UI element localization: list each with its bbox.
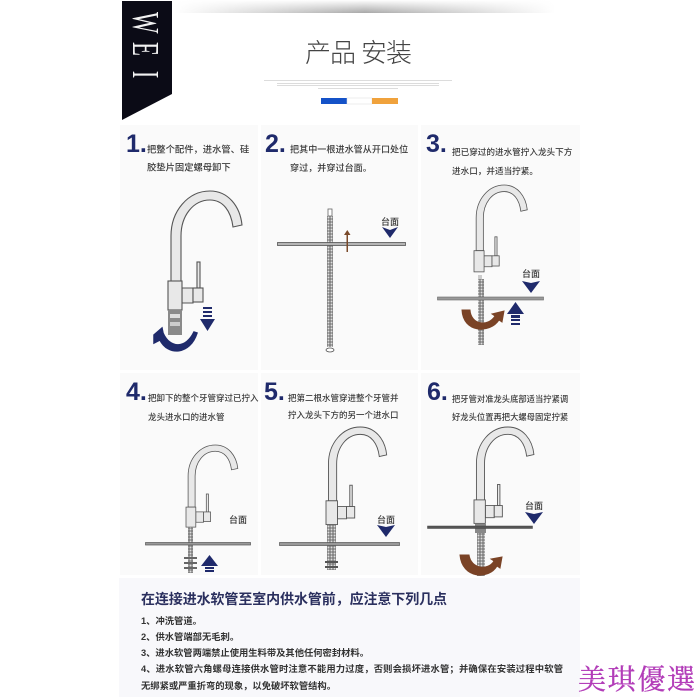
icon: faucet 6	[474, 427, 534, 523]
number 6: 6.	[427, 378, 448, 406]
notes list: 2、供水管端部无毛刺。	[141, 631, 239, 642]
colour bar	[321, 98, 398, 104]
subtitle fine print	[264, 80, 452, 89]
icon: faucet 5	[326, 427, 387, 525]
label 台面: 台面	[229, 514, 247, 525]
nut 4	[184, 557, 197, 569]
icon: up arrow	[344, 230, 350, 252]
instructions 3	[452, 146, 573, 176]
instructions 2	[290, 144, 408, 173]
number 5: 5.	[264, 378, 285, 406]
icon: down arrow	[200, 307, 215, 331]
counter 2	[278, 242, 406, 246]
instructions 2: 穿过，并穿过台面。	[290, 162, 372, 173]
counter 5	[280, 542, 400, 546]
label 台面: 台面	[522, 268, 540, 279]
instructions 6: 好龙头位置再把大螺母固定拧紧	[452, 412, 568, 422]
hose 6	[475, 524, 486, 576]
number 4: 4.	[126, 378, 147, 406]
instructions 2: 把其中一根进水管从开口处位	[290, 144, 408, 154]
panel: step 4	[126, 378, 259, 573]
instructions 1	[147, 144, 249, 172]
panel: step 6	[427, 378, 568, 576]
icon: triangle	[377, 525, 395, 537]
counter 4	[146, 542, 250, 545]
counter 6	[428, 526, 532, 528]
number 1: 1.	[126, 130, 147, 158]
label 台面: 台面	[377, 514, 395, 525]
instructions 6: 把牙管对准龙头底部适当拧紧调	[452, 394, 568, 404]
instructions 4: 把卸下的整个牙管穿过已拧入	[148, 393, 259, 403]
notes list	[141, 615, 563, 691]
instructions 4: 龙头进水口的进水管	[148, 412, 225, 422]
panel: step 3	[426, 130, 573, 345]
icon: up arrow	[507, 302, 524, 325]
instructions 5: 拧入龙头下方的另一个进水口	[288, 410, 399, 420]
instructions 6	[452, 394, 568, 422]
label 台面: 台面	[525, 500, 543, 511]
icon: faucet 4	[186, 445, 238, 527]
title: 产品 安装	[305, 38, 412, 68]
panel: step 5	[264, 378, 400, 570]
icon: triangle	[525, 512, 543, 524]
hose 2	[326, 209, 334, 352]
icon: up arrow	[201, 555, 218, 572]
instructions 1: 胶垫片固定螺母卸下	[147, 162, 231, 172]
instructions 3: 把已穿过的进水管拧入龙头下方	[452, 146, 573, 157]
instructions 1: 把整个配件，进水管、硅	[147, 144, 249, 154]
panel: step 1	[126, 130, 249, 351]
icon: rotate arrow	[462, 310, 504, 329]
notes list: 无绑紧或严重折弯的现象，以免破坏软管结构。	[141, 680, 336, 691]
instructions 4	[148, 393, 259, 422]
brand ribbon	[122, 1, 172, 120]
notes list: 1、冲洗管道。	[141, 615, 202, 626]
panel: step backgrounds	[120, 125, 580, 575]
instructions 5: 把第二根水管穿进整个牙管并	[288, 393, 399, 403]
panel: notes	[119, 578, 580, 697]
counter 3	[438, 297, 544, 300]
icon: faucet 3	[474, 185, 527, 272]
notes list: 3、进水软管两端禁止使用生料带及其他任何密封材料。	[141, 647, 369, 658]
brand ribbon: WEI	[125, 12, 167, 78]
number 2: 2.	[265, 130, 286, 158]
label 台面: 台面	[381, 216, 399, 227]
icon: triangle	[382, 227, 398, 238]
number 3: 3.	[426, 130, 447, 158]
watermark: 美琪優選	[578, 664, 696, 696]
hose 5	[325, 525, 338, 570]
icon: triangle	[522, 281, 540, 293]
icon: rotate arrow	[460, 555, 502, 575]
notes heading: 在连接进水软管至室内供水管前，应注意下列几点	[141, 591, 447, 607]
panel: step 2	[265, 130, 408, 352]
notes list: 4、进水软管六角螺母连接供水管时注意不能用力过度，否则会损坏进水管；并确保在安装过程中软管	[141, 663, 563, 675]
icon: faucet 1	[168, 191, 242, 310]
thread 1	[168, 310, 182, 335]
hose 4	[188, 527, 193, 573]
top shadow band	[175, 0, 555, 13]
instructions 3: 进水口，并适当拧紧。	[452, 165, 538, 176]
instructions 5	[288, 393, 399, 420]
hose 3	[478, 275, 484, 345]
icon: rotate arrow	[154, 328, 197, 351]
